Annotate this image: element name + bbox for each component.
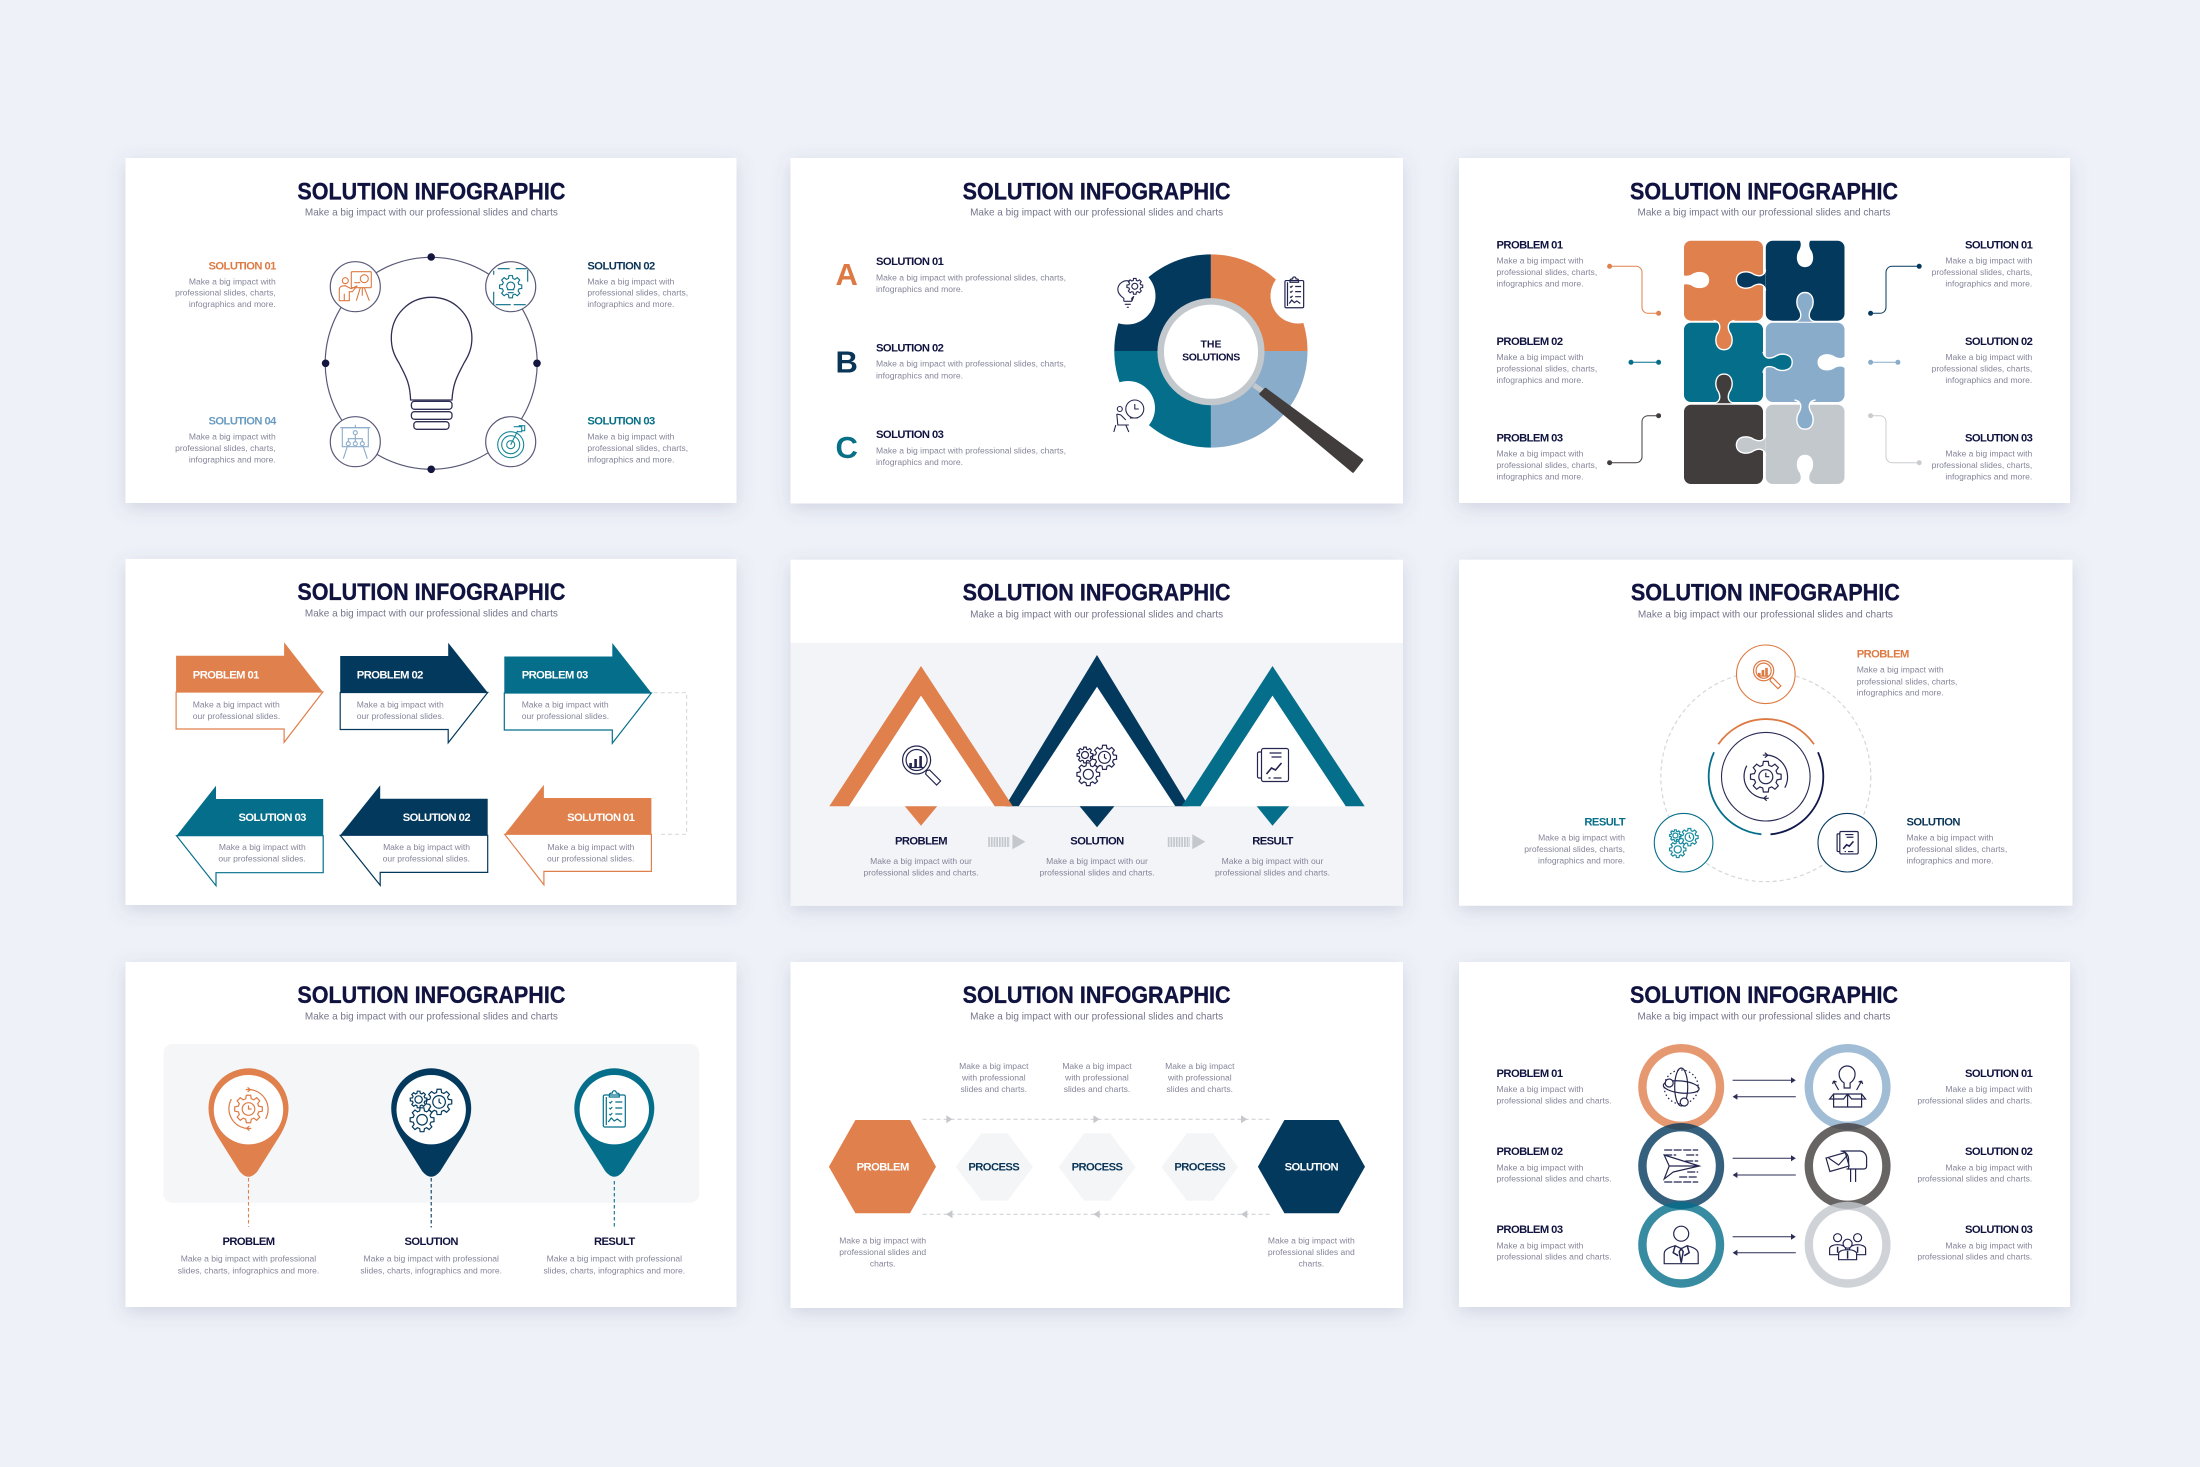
arrow: solution 01: SOLUTION 01 <box>567 812 635 824</box>
dashed flow bottom <box>923 1210 1271 1218</box>
hexagon: solution <box>1258 1120 1365 1213</box>
solution C: C <box>836 430 858 465</box>
panel: puzzle <box>1459 158 2070 503</box>
problem 02 text: Make a big impact with <box>1496 1162 1584 1172</box>
problem 03 text: professional slides, charts, <box>1496 460 1597 470</box>
arrow: problem 01 <box>176 642 323 742</box>
icon: gear bulb in circle <box>486 262 536 312</box>
hexagon: process 2 <box>1059 1133 1136 1201</box>
solution text: SOLUTION <box>1906 816 1960 828</box>
problem text: infographics and more. <box>1857 688 1944 698</box>
solution 01 text: SOLUTION 01 <box>1965 1068 2033 1080</box>
solution 02 text <box>1932 336 2033 385</box>
solution text: Make a big impact with professional <box>364 1254 499 1264</box>
solution text: Make a big impact with our <box>1046 856 1148 866</box>
problem text: PROBLEM <box>222 1236 275 1248</box>
solution 01 text <box>1932 240 2033 289</box>
solution 02 text: Make a big impact with <box>1945 1162 2033 1172</box>
solution 03 text: infographics and more. <box>587 454 674 464</box>
arrows row 2 <box>1733 1155 1796 1178</box>
arrow: problem 02: PROBLEM 02 <box>357 670 423 682</box>
problem 01 text: PROBLEM 01 <box>1496 240 1563 252</box>
icon: org chart in circle <box>330 417 380 467</box>
solution 02 text: infographics and more. <box>587 299 674 309</box>
arrow: solution 01: Make a big impact with <box>547 842 635 852</box>
solution A: SOLUTION 01 <box>876 256 944 268</box>
solution 03 text <box>1917 1224 2033 1262</box>
solution 03 text <box>1932 433 2033 482</box>
solution 02 text <box>587 260 688 309</box>
arrow: problem 01: Make a big impact with <box>193 700 280 710</box>
solution B: B <box>836 344 858 379</box>
solution 01 text: SOLUTION 01 <box>1965 240 2033 252</box>
icon: box with bulb <box>1830 1066 1866 1107</box>
rings: problems <box>1642 1048 1720 1284</box>
arrow: problem 02 <box>340 643 488 743</box>
solution 01 text: infographics and more. <box>1945 279 2032 289</box>
solution 04 text <box>175 416 277 464</box>
process notes: slides and charts. <box>1064 1084 1130 1094</box>
hexagon: process 3 <box>1161 1133 1238 1201</box>
arrow: problem 01: our professional slides. <box>193 711 280 721</box>
solution 01 text <box>175 260 276 309</box>
solution 01 text: infographics and more. <box>189 299 276 309</box>
subtitle: Make a big impact with our professional slides and charts <box>1638 207 1890 218</box>
solution text <box>1040 835 1154 878</box>
panel: linked rings <box>1459 962 2070 1307</box>
subtitle: Make a big impact with our professional slides and charts <box>305 207 558 218</box>
problem 03 text: infographics and more. <box>1496 472 1583 482</box>
donut chart <box>1098 254 1326 448</box>
subtitle: Make a big impact with our professional slides and charts <box>1638 1012 1890 1023</box>
pointers <box>905 806 1289 827</box>
panel: arrows <box>126 559 736 905</box>
problem 02 text: infographics and more. <box>1496 375 1583 385</box>
process notes: with professional <box>1064 1073 1129 1083</box>
problem note: Make a big impact with <box>839 1235 926 1245</box>
arrow: striped 1 <box>988 834 1025 849</box>
problem 01 text <box>1496 1068 1611 1105</box>
solution C: infographics and more. <box>876 457 963 467</box>
problem text: slides, charts, infographics and more. <box>178 1265 319 1275</box>
result text <box>1524 816 1626 866</box>
result text <box>1215 835 1330 878</box>
icon circle: result <box>1654 813 1713 872</box>
hexagon: process 1: PROCESS <box>968 1162 1020 1174</box>
solution text: professional slides and charts. <box>1040 868 1154 878</box>
problem 01 text <box>1496 240 1597 289</box>
title: SOLUTION INFOGRAPHIC <box>297 178 565 205</box>
problem text: PROBLEM <box>895 835 947 847</box>
hexagon: problem <box>829 1120 936 1213</box>
problem note: charts. <box>870 1258 896 1268</box>
arrow: problem 03: our professional slides. <box>522 711 609 721</box>
title: SOLUTION INFOGRAPHIC <box>1630 982 1898 1009</box>
arrows row 3 <box>1733 1234 1796 1256</box>
problem 01 text: Make a big impact with <box>1496 256 1584 266</box>
solution 01 text: professional slides, charts, <box>175 288 276 298</box>
solution 02 text: infographics and more. <box>1945 375 2032 385</box>
hexagon: solution: SOLUTION <box>1285 1162 1338 1174</box>
solution 04 text: professional slides, charts, <box>175 443 276 453</box>
grey card <box>164 1044 699 1203</box>
connector: problem 03 <box>1608 414 1661 465</box>
arrow: solution 01: our professional slides. <box>547 854 634 864</box>
icon: magnifier chart <box>903 746 941 785</box>
arrow: solution 02 <box>340 785 488 885</box>
connector: problem 02 <box>1629 360 1661 364</box>
solution A: A <box>836 257 858 292</box>
result text: Make a big impact with professional <box>547 1254 682 1264</box>
subtitle: Make a big impact with our professional slides and charts <box>970 610 1223 621</box>
solution text: professional slides, charts, <box>1906 844 2007 854</box>
problem text <box>1857 648 1957 698</box>
arrow: problem 02: our professional slides. <box>357 711 444 721</box>
solution 02 text: Make a big impact with <box>587 276 675 286</box>
process notes: Make a big impact <box>1062 1061 1132 1071</box>
arrow: problem 02: Make a big impact with <box>357 700 444 710</box>
problem 02 text <box>1496 336 1597 385</box>
title: SOLUTION INFOGRAPHIC <box>963 178 1231 205</box>
result text: RESULT <box>1584 816 1626 828</box>
problem 02 text: PROBLEM 02 <box>1496 336 1563 348</box>
solution 03 text: Make a big impact with <box>1945 1240 2033 1250</box>
solution 02 text: professional slides, charts, <box>587 288 688 298</box>
magnifier <box>1161 301 1362 472</box>
problem 03 text: Make a big impact with <box>1496 1240 1584 1250</box>
problem 01 text: professional slides and charts. <box>1496 1095 1611 1105</box>
solution 03 text <box>587 416 688 464</box>
grey band <box>790 643 1403 906</box>
problem text: professional slides and charts. <box>864 868 978 878</box>
subtitle: Make a big impact with our professional slides and charts <box>305 1012 558 1023</box>
problem text: PROBLEM <box>1857 648 1909 660</box>
problem 01 text: Make a big impact with <box>1496 1084 1584 1094</box>
process notes: with professional <box>1167 1073 1232 1083</box>
problem 01 text: professional slides, charts, <box>1496 267 1597 277</box>
icon circle: problem <box>1736 645 1795 704</box>
icon: clipboard <box>1285 277 1304 308</box>
panel: magnifier donut <box>790 158 1403 504</box>
hexagon: process 1 <box>956 1133 1033 1201</box>
rings: solutions <box>1809 1048 1886 1284</box>
solution C: SOLUTION 03 <box>876 429 944 441</box>
triangle: problem <box>829 666 1013 806</box>
icon: gear clock <box>1744 753 1788 801</box>
solution 01 text: professional slides and charts. <box>1917 1095 2032 1105</box>
solution C: Make a big impact with professional slides, charts, <box>876 445 1066 455</box>
arrow: solution 03: SOLUTION 03 <box>238 812 306 824</box>
arrow: striped 2 <box>1168 834 1205 849</box>
solution B: SOLUTION 02 <box>876 343 944 355</box>
icon: team <box>1830 1234 1866 1260</box>
solution 02 text <box>1917 1146 2033 1184</box>
icon: paper plane <box>1664 1150 1699 1182</box>
result text: professional slides and charts. <box>1215 868 1330 878</box>
problem 03 text: PROBLEM 03 <box>1496 1224 1563 1236</box>
solution A <box>836 256 1066 294</box>
solution 03 text: infographics and more. <box>1945 472 2032 482</box>
title: SOLUTION INFOGRAPHIC <box>297 579 565 606</box>
icon: bulb gear <box>1118 278 1143 307</box>
result text: Make a big impact with our <box>1222 856 1323 866</box>
donut centre label: SOLUTIONS <box>1182 351 1240 363</box>
solution 04 text: Make a big impact with <box>189 432 276 442</box>
triangle: solution <box>1005 655 1189 806</box>
solution 04 text: infographics and more. <box>189 454 276 464</box>
arrow: solution 02: Make a big impact with <box>383 842 470 852</box>
arrow: solution 02: our professional slides. <box>383 854 470 864</box>
result text: Make a big impact with <box>1538 833 1625 843</box>
solution note: Make a big impact with <box>1268 1235 1355 1245</box>
ring with dots <box>322 253 541 473</box>
solution A: Make a big impact with professional slides, charts, <box>876 272 1066 282</box>
pin: problem <box>208 1068 288 1227</box>
triangle: result <box>1182 666 1365 806</box>
solution text: infographics and more. <box>1906 856 1993 866</box>
process notes: Make a big impact <box>1165 1061 1235 1071</box>
subtitle: Make a big impact with our professional slides and charts <box>970 1012 1223 1023</box>
problem 01 text: PROBLEM 01 <box>1496 1068 1563 1080</box>
solution 01 text <box>1917 1068 2033 1105</box>
title: SOLUTION INFOGRAPHIC <box>1631 580 1900 607</box>
icon: document chart <box>1258 748 1288 782</box>
puzzle pieces <box>1680 238 1847 484</box>
problem 02 text <box>1496 1146 1611 1184</box>
arrow: problem 03: Make a big impact with <box>522 700 609 710</box>
problem note: professional slides and <box>839 1247 926 1257</box>
title: SOLUTION INFOGRAPHIC <box>963 580 1231 607</box>
solution 03 text: SOLUTION 03 <box>1965 1224 2033 1236</box>
solution B: infographics and more. <box>876 370 963 380</box>
process notes: with professional <box>961 1073 1026 1083</box>
solution 01 text: Make a big impact with <box>189 276 276 286</box>
solution 03 text: SOLUTION 03 <box>587 416 655 428</box>
process notes: Make a big impact <box>959 1061 1029 1071</box>
icon: person with clock <box>1114 400 1144 432</box>
hexagon: problem: PROBLEM <box>857 1162 909 1174</box>
solution 03 text: Make a big impact with <box>587 432 675 442</box>
problem 02 text: professional slides, charts, <box>1496 364 1597 374</box>
solution text: SOLUTION <box>404 1236 458 1248</box>
hexagon: process 2: PROCESS <box>1072 1162 1124 1174</box>
arrows row 1 <box>1733 1077 1796 1100</box>
solution text <box>360 1236 502 1275</box>
arrow: solution 03: our professional slides. <box>218 854 306 864</box>
problem 01 text: infographics and more. <box>1496 279 1583 289</box>
problem 02 text: PROBLEM 02 <box>1496 1146 1563 1158</box>
donut centre label: THE <box>1200 338 1222 350</box>
title: SOLUTION INFOGRAPHIC <box>963 982 1231 1009</box>
solution 01 text: Make a big impact with <box>1945 1084 2033 1094</box>
problem text: Make a big impact with our <box>870 856 972 866</box>
solution A: infographics and more. <box>876 284 963 294</box>
connector: problem 01 <box>1608 264 1661 315</box>
solution C <box>836 429 1066 467</box>
result text: RESULT <box>594 1236 635 1248</box>
hexagon: process 3: PROCESS <box>1174 1162 1226 1174</box>
arrow: problem 01: PROBLEM 01 <box>193 670 259 682</box>
process notes <box>959 1061 1235 1094</box>
solution 02 text: SOLUTION 02 <box>1965 336 2033 348</box>
connector: solution 02 <box>1869 360 1900 364</box>
arrow: problem 03: PROBLEM 03 <box>522 670 588 682</box>
problem text: professional slides, charts, <box>1857 676 1957 686</box>
title: SOLUTION INFOGRAPHIC <box>297 982 565 1009</box>
panel: hexagon process <box>790 962 1403 1308</box>
problem 02 text: professional slides and charts. <box>1496 1174 1611 1184</box>
solution B <box>836 343 1066 380</box>
solution 02 text: Make a big impact with <box>1945 352 2033 362</box>
problem 03 text: PROBLEM 03 <box>1496 433 1563 445</box>
pin: result <box>574 1068 654 1229</box>
solution B: Make a big impact with professional slides, charts, <box>876 359 1066 369</box>
solution 04 text: SOLUTION 04 <box>208 416 277 428</box>
icon circle: solution <box>1818 813 1877 872</box>
solution note: charts. <box>1298 1258 1324 1268</box>
solution 03 text: professional slides and charts. <box>1917 1252 2032 1262</box>
pin: solution <box>391 1068 471 1228</box>
solution note: professional slides and <box>1268 1247 1355 1257</box>
panel: cycle <box>1459 560 2072 906</box>
problem text <box>178 1236 319 1275</box>
solution 01 text: Make a big impact with <box>1945 256 2033 266</box>
problem 02 text: Make a big impact with <box>1496 352 1584 362</box>
result text: RESULT <box>1252 835 1294 847</box>
process notes: slides and charts. <box>1167 1084 1233 1094</box>
solution 03 text: professional slides, charts, <box>587 443 688 453</box>
solution text: Make a big impact with <box>1906 833 1994 843</box>
result text: infographics and more. <box>1538 856 1625 866</box>
arrow: solution 01 <box>505 785 651 885</box>
subtitle: Make a big impact with our professional slides and charts <box>970 207 1223 218</box>
problem 03 text <box>1496 1224 1611 1262</box>
solution 01 text: professional slides, charts, <box>1932 267 2032 277</box>
problem 03 text: Make a big impact with <box>1496 449 1584 459</box>
problem text: Make a big impact with <box>1857 665 1944 675</box>
subtitle: Make a big impact with our professional slides and charts <box>1638 610 1893 621</box>
panel: map pins <box>126 962 736 1307</box>
problem text <box>864 835 978 878</box>
title: SOLUTION INFOGRAPHIC <box>1630 178 1898 205</box>
dashed connector <box>654 693 687 834</box>
result text: professional slides, charts, <box>1524 844 1625 854</box>
dashed orbit <box>1661 672 1871 882</box>
panel: lightbulb solutions <box>126 158 736 503</box>
icon: person <box>1664 1226 1698 1264</box>
solution 03 text: SOLUTION 03 <box>1965 433 2033 445</box>
problem text: Make a big impact with professional <box>181 1254 316 1264</box>
subtitle: Make a big impact with our professional slides and charts <box>305 609 558 620</box>
connector: solution 01 <box>1869 264 1921 315</box>
arrow: solution 03: Make a big impact with <box>219 842 306 852</box>
problem 03 text <box>1496 433 1597 482</box>
panel: triangles <box>790 560 1403 906</box>
solution 02 text: professional slides, charts, <box>1932 364 2032 374</box>
result text: slides, charts, infographics and more. <box>544 1265 685 1275</box>
solution 02 text: SOLUTION 02 <box>1965 1146 2033 1158</box>
solution 03 text: professional slides, charts, <box>1932 460 2032 470</box>
icon: lightbulb <box>391 297 472 429</box>
solution text: SOLUTION <box>1070 835 1124 847</box>
solution 01 text: SOLUTION 01 <box>208 260 276 272</box>
solution text: slides, charts, infographics and more. <box>360 1265 502 1275</box>
centre rings <box>1709 719 1823 834</box>
icon: target in circle <box>486 417 536 467</box>
process notes: slides and charts. <box>961 1084 1027 1094</box>
connector: solution 03 <box>1869 414 1921 465</box>
arrow: solution 03 <box>176 786 323 886</box>
dashed flow top <box>923 1115 1271 1123</box>
problem 03 text: professional slides and charts. <box>1496 1252 1611 1262</box>
result text <box>544 1236 685 1275</box>
arrow: solution 02: SOLUTION 02 <box>403 812 470 824</box>
arrow: problem 03 <box>504 643 651 743</box>
icon: gears <box>1077 745 1117 786</box>
solution 02 text: professional slides and charts. <box>1917 1174 2032 1184</box>
solution 02 text: SOLUTION 02 <box>587 260 655 272</box>
solution text <box>1906 816 2007 866</box>
solution 03 text: Make a big impact with <box>1945 449 2033 459</box>
icon: globe <box>1663 1068 1700 1106</box>
icon: presenter in circle <box>330 262 380 312</box>
icon: mailbox <box>1826 1151 1867 1182</box>
